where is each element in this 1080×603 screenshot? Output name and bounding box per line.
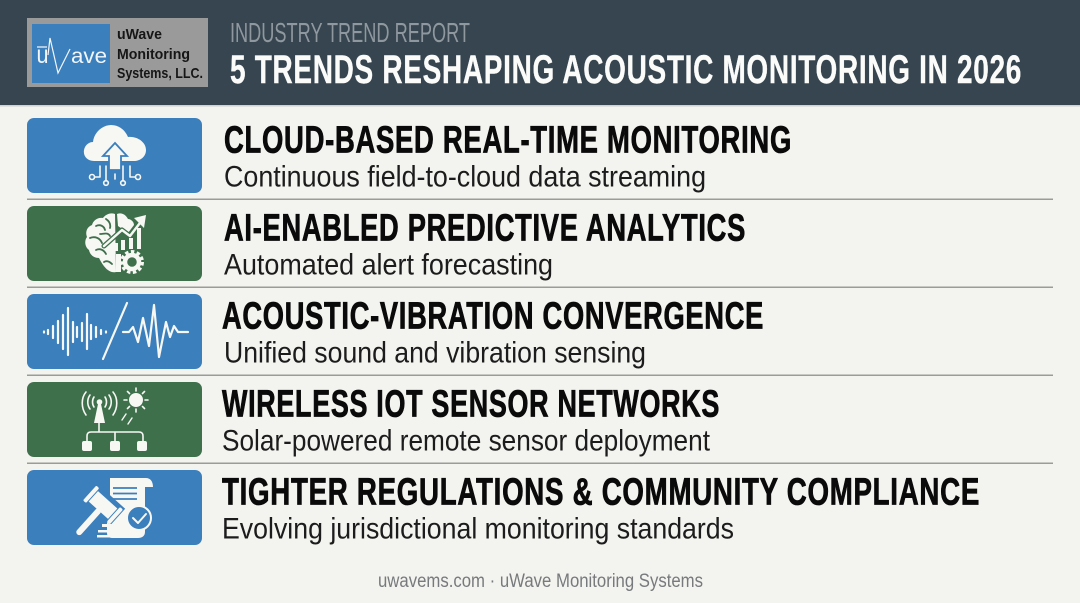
- logo: [27, 18, 208, 87]
- heading: CLOUD-BASED REAL-TIME MONITORING: [224, 120, 792, 162]
- heading: ACOUSTIC-VIBRATION CONVERGENCE: [222, 296, 764, 338]
- dividers: [27, 198, 1053, 464]
- panel: regulations: [27, 470, 980, 547]
- panel: cloud monitoring: [27, 118, 792, 194]
- logo: Monitoring: [117, 46, 190, 63]
- logo: u: [36, 41, 48, 69]
- subheading: Continuous field-to-cloud data streaming: [224, 160, 706, 194]
- subheading: Solar-powered remote sensor deployment: [222, 424, 711, 458]
- subheading: Evolving jurisdictional monitoring standards: [222, 512, 734, 546]
- logo: ave: [71, 45, 107, 68]
- logo: uWave: [117, 26, 162, 43]
- eyebrow: INDUSTRY TREND REPORT: [230, 17, 470, 48]
- heading: AI-ENABLED PREDICTIVE ANALYTICS: [224, 208, 746, 250]
- panel: acoustic vibration: [27, 294, 764, 370]
- icon: cloud upload: [27, 118, 202, 193]
- panel: wireless IoT: [27, 382, 720, 458]
- icon: antenna, sun and sensor nodes: [27, 382, 202, 457]
- subheading: Unified sound and vibration sensing: [224, 336, 646, 370]
- icon: brain and chart: [27, 206, 202, 281]
- header band: [0, 0, 1080, 106]
- footer: uwavems.com · uWave Monitoring Systems: [378, 571, 703, 592]
- icon: gavel and document: [27, 470, 202, 547]
- heading: WIRELESS IOT SENSOR NETWORKS: [222, 384, 720, 426]
- subheading: Automated alert forecasting: [224, 248, 553, 282]
- logo: Systems, LLC.: [117, 65, 203, 82]
- icon: sound wave and vibration trace: [27, 294, 202, 369]
- panel: predictive analytics: [27, 206, 746, 282]
